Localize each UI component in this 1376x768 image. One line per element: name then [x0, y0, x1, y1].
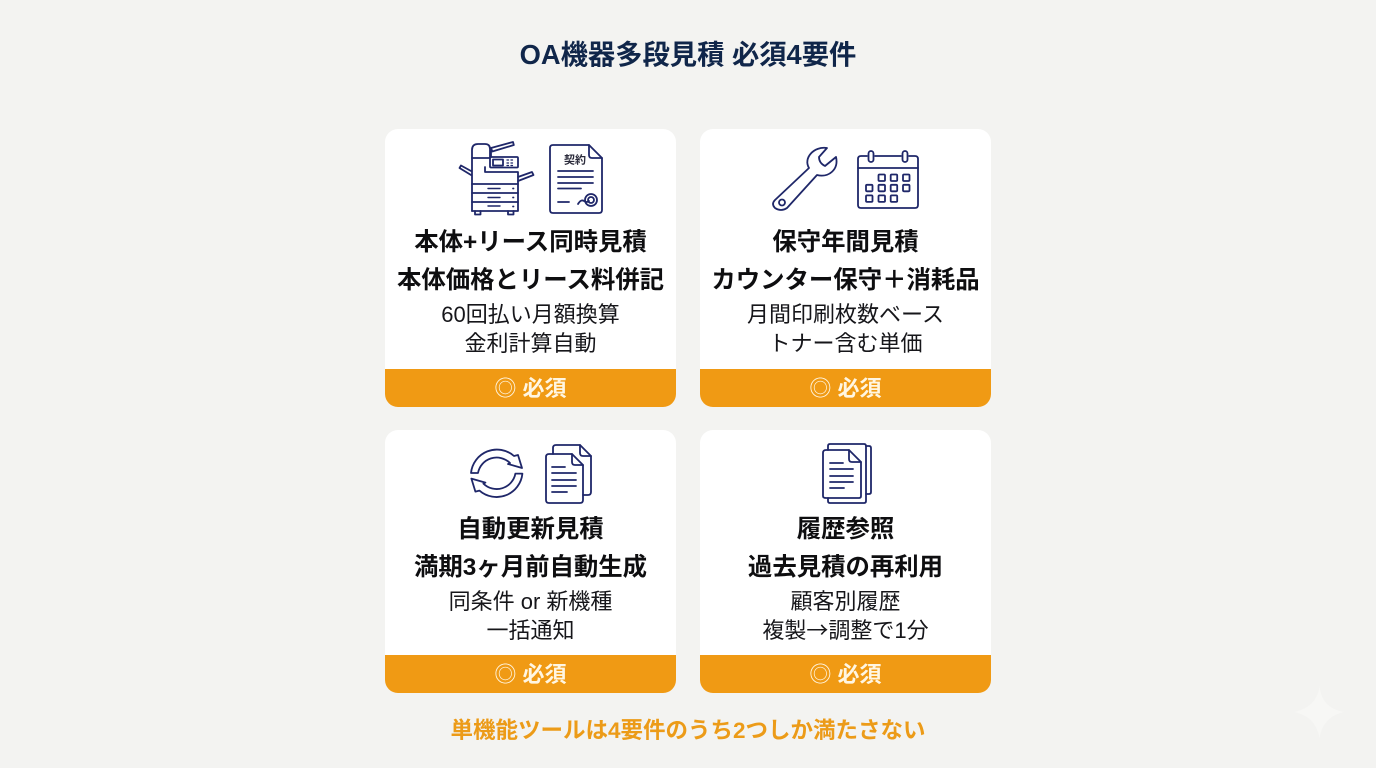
icon: calendar — [857, 150, 919, 209]
subheading: price and lease listing: 本体価格とリース料併記 — [397, 267, 664, 294]
detail: monthly conversion: 60回払い月額換算 — [441, 302, 620, 327]
icon: contract document: 契約 — [564, 152, 586, 166]
badge: required — [385, 655, 676, 693]
title: OA機器多段見積 必須4要件 — [520, 39, 856, 70]
badge: required: ◎ 必須 — [809, 662, 882, 687]
icon: document stack — [545, 444, 592, 504]
detail: bulk notification: 一括通知 — [486, 618, 574, 643]
icon: contract document — [549, 144, 603, 214]
badge: required: ◎ 必須 — [494, 376, 567, 401]
badge: required — [385, 369, 676, 407]
panel: body + lease quote — [385, 129, 676, 407]
badge: required — [700, 655, 991, 693]
badge: required: ◎ 必須 — [494, 662, 567, 687]
panel: auto renewal quote — [385, 430, 676, 693]
heading: history: 履歴参照 — [797, 516, 894, 543]
detail: per customer history: 顧客別履歴 — [790, 589, 900, 614]
icon: wrench — [772, 146, 838, 211]
detail: duplicate and adjust: 複製→調整で1分 — [762, 613, 929, 645]
badge: required: ◎ 必須 — [809, 376, 882, 401]
heading: body + lease: 本体+リース同時見積 — [414, 229, 647, 256]
subheading: reuse past quotes: 過去見積の再利用 — [748, 554, 943, 581]
panel: history reference — [700, 430, 991, 693]
heading: maintenance: 保守年間見積 — [772, 229, 919, 256]
icon: sparkle watermark — [1294, 686, 1344, 738]
detail: toner included: トナー含む単価 — [768, 331, 922, 356]
detail: interest calculation: 金利計算自動 — [464, 331, 596, 356]
icon: copier — [458, 141, 534, 216]
subheading: counter maintenance: カウンター保守＋消耗品 — [711, 267, 980, 294]
heading: auto renewal: 自動更新見積 — [457, 516, 604, 543]
icon: refresh arrows — [470, 448, 524, 498]
detail: monthly prints: 月間印刷枚数ベース — [747, 302, 944, 327]
badge: required — [700, 369, 991, 407]
subheading: three months before expiry: 満期3ヶ月前自動生成 — [414, 554, 647, 581]
icon: file stack — [822, 443, 872, 504]
panel: annual maintenance quote — [700, 129, 991, 407]
detail: same terms or new model: 同条件 or 新機種 — [449, 589, 612, 614]
footer note: 単機能ツールは4要件のうち2つしか満たさない — [450, 718, 926, 743]
